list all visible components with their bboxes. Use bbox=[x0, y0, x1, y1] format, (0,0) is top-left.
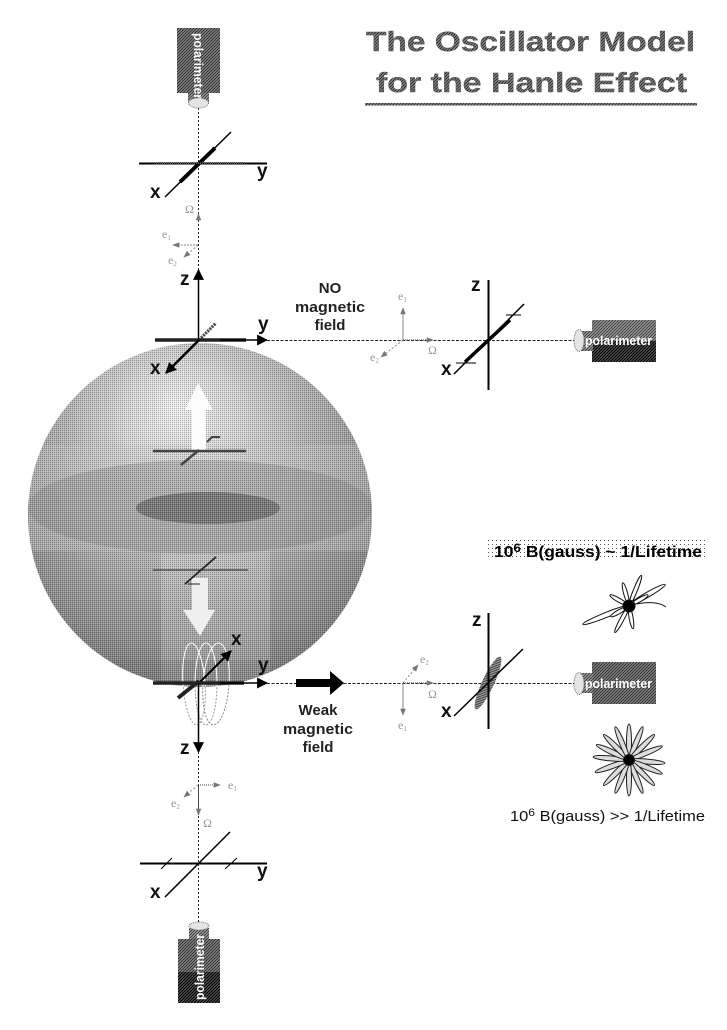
polarization vectors bottom bbox=[171, 778, 237, 830]
equation: strong field: B(gauss) >> 1/Lifetime bbox=[535, 808, 705, 825]
axes: bottom polarizer bbox=[140, 832, 268, 903]
label x: x bbox=[441, 359, 452, 380]
equation box: comparable field: 10 bbox=[494, 544, 511, 561]
e1 label: 1 bbox=[403, 296, 407, 304]
inner axes upper bbox=[153, 437, 246, 465]
polarimeter: right upper bbox=[574, 320, 656, 362]
polarimeter: bottom bbox=[178, 922, 220, 1003]
title line 1: The Oscillator Model bbox=[366, 26, 695, 57]
e2 label: 2 bbox=[176, 803, 180, 811]
e1 label: 1 bbox=[403, 725, 407, 733]
label x: x bbox=[441, 701, 452, 722]
e1 label: 1 bbox=[167, 234, 171, 242]
label y: y bbox=[257, 861, 268, 882]
polarization vectors top bbox=[162, 202, 198, 268]
label x: x bbox=[231, 629, 242, 650]
label x: x bbox=[150, 182, 161, 203]
radiation pattern: partially depolarized bbox=[582, 575, 666, 633]
axes: right, no field bbox=[441, 275, 524, 390]
title line 2: for the Hanle Effect bbox=[376, 67, 687, 98]
title bbox=[365, 26, 697, 106]
label x: x bbox=[150, 882, 161, 903]
axes: top polarizer bbox=[139, 132, 268, 203]
equation: strong field: 10 bbox=[510, 808, 527, 825]
label z: z bbox=[180, 269, 190, 290]
e1 label: e bbox=[398, 718, 403, 732]
e2 label: 2 bbox=[173, 260, 177, 268]
e2 label: e bbox=[370, 350, 375, 364]
polarimeter: right lower: polarimeter bbox=[585, 676, 652, 691]
e1 label: e bbox=[162, 227, 167, 241]
upward white arrow bbox=[185, 383, 213, 451]
axes: origin no field bbox=[150, 269, 269, 379]
e1 label: e bbox=[398, 289, 403, 303]
e2 label: e bbox=[168, 253, 173, 267]
e2 label: e bbox=[171, 796, 176, 810]
label y: y bbox=[257, 161, 268, 182]
omega: Ω bbox=[203, 816, 212, 830]
equation box: comparable field: 6 bbox=[513, 541, 521, 555]
e1 label: e bbox=[228, 778, 233, 792]
label z: z bbox=[471, 275, 480, 296]
equation box: comparable field: B(gauss) ~ 1/Lifetime bbox=[521, 544, 702, 561]
polarimeter: top: polarimeter bbox=[191, 33, 206, 99]
omega: Ω bbox=[428, 687, 437, 701]
caption: weak magnetic field: magnetic bbox=[283, 721, 353, 738]
sphere bbox=[28, 340, 372, 691]
caption: no magnetic field: magnetic bbox=[295, 299, 365, 316]
polarimeter: top bbox=[177, 28, 220, 108]
inner axes lower bbox=[153, 557, 248, 584]
arrow: magnetic field direction bbox=[296, 671, 344, 695]
polarization vectors no field bbox=[370, 289, 437, 365]
axes: right, weak field bbox=[441, 610, 523, 729]
precession loops bbox=[180, 642, 232, 726]
dashed line: weak field bbox=[267, 682, 577, 684]
equation: strong field: 6 bbox=[528, 807, 535, 819]
equation box: comparable field bbox=[488, 540, 705, 561]
omega: Ω bbox=[428, 343, 437, 357]
e1 label: 1 bbox=[233, 785, 237, 793]
e2 label: e bbox=[420, 652, 425, 666]
caption: no magnetic field: NO bbox=[319, 280, 342, 297]
dashed line: no field bbox=[267, 340, 577, 342]
label z: z bbox=[472, 610, 482, 631]
downward white arrow bbox=[183, 578, 215, 636]
omega: Ω bbox=[185, 202, 194, 216]
label y: y bbox=[258, 655, 269, 676]
axis: optical line bottom bbox=[198, 752, 200, 925]
radiation pattern: fully depolarized bbox=[593, 724, 665, 796]
label z: z bbox=[180, 738, 190, 759]
e2 label: 2 bbox=[425, 659, 429, 667]
label x: x bbox=[150, 358, 161, 379]
polarimeter: bottom: polarimeter bbox=[192, 934, 207, 1000]
title underline bbox=[365, 103, 697, 106]
label y: y bbox=[258, 314, 269, 335]
polarization vectors weak field bbox=[398, 652, 437, 733]
caption: no magnetic field: field bbox=[315, 317, 345, 334]
axis: optical line top bbox=[198, 108, 200, 270]
axes: weak field origin bbox=[153, 629, 269, 759]
polarimeter: right upper: polarimeter bbox=[585, 333, 652, 348]
caption: weak magnetic field: Weak bbox=[299, 702, 338, 719]
e2 label: 2 bbox=[375, 357, 379, 365]
polarimeter: right lower bbox=[574, 662, 656, 704]
caption: weak magnetic field: field bbox=[303, 739, 333, 756]
